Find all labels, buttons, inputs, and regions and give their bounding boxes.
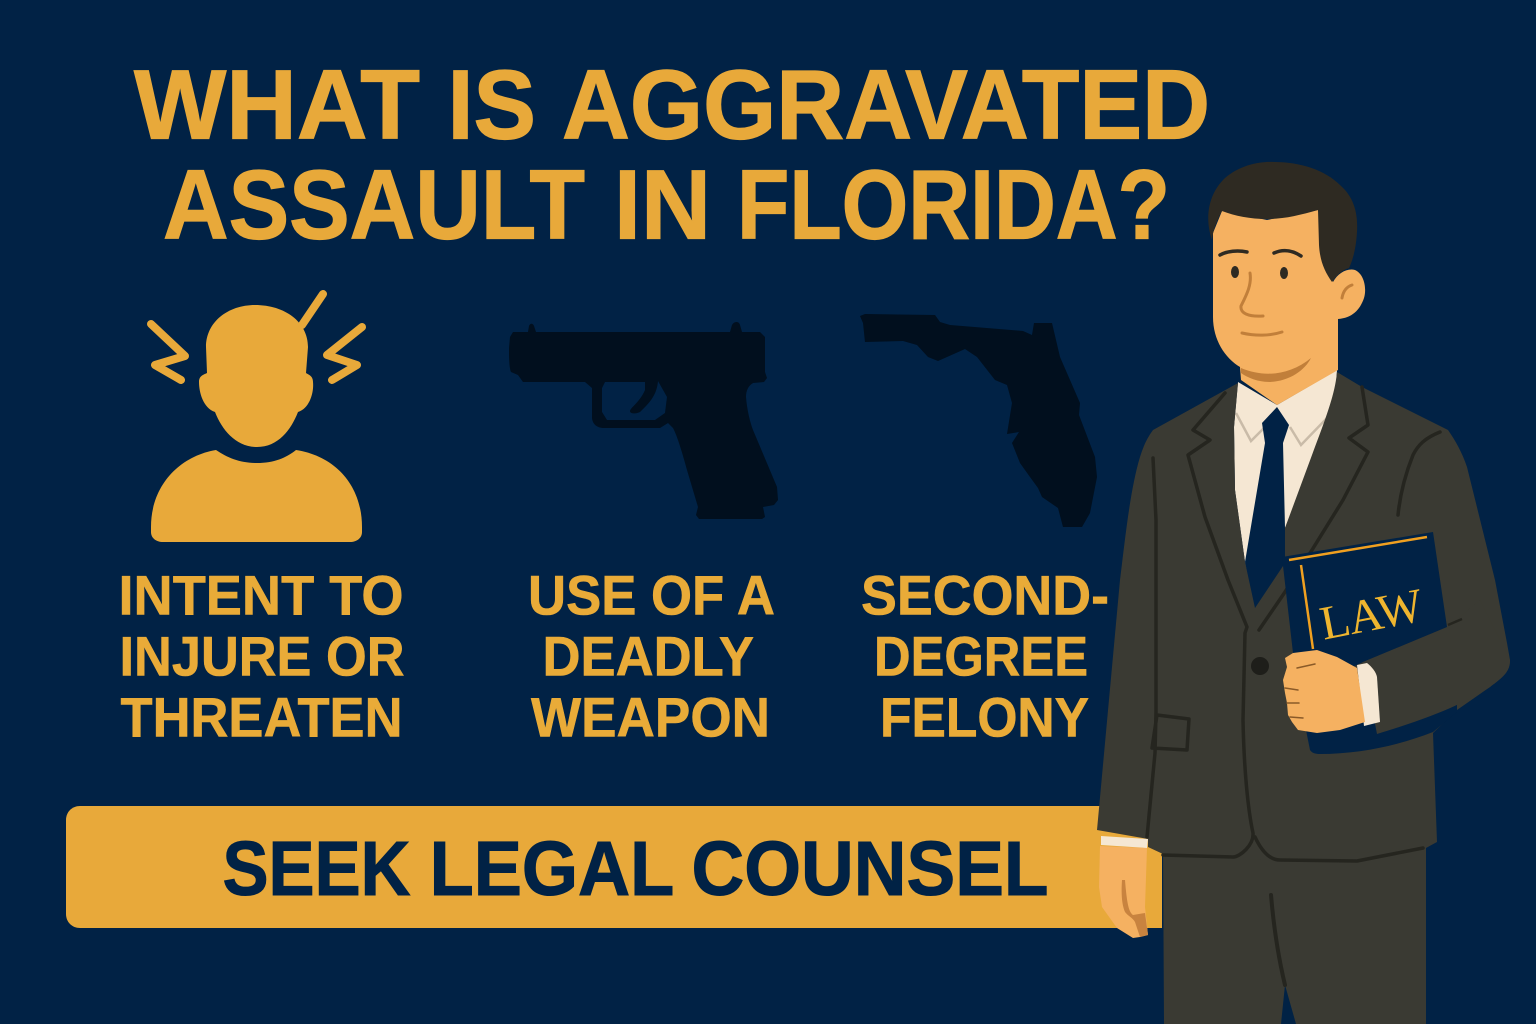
hand holding book	[1283, 650, 1365, 733]
label: intent: INJURE OR	[120, 624, 404, 688]
title: AGGRAVATED	[562, 50, 1210, 160]
title	[134, 50, 1210, 260]
icon: pistol	[509, 322, 778, 519]
tie	[1245, 407, 1289, 608]
collar shadows	[1236, 413, 1328, 445]
shirt cuff left	[1101, 836, 1148, 848]
banner text	[222, 826, 1048, 912]
label: intent: INTENT TO	[118, 564, 404, 626]
label: intent	[118, 564, 404, 748]
label: felony: DEGREE	[874, 624, 1088, 688]
banner text: COUNSEL	[692, 826, 1048, 912]
label: felony: SECOND-	[861, 564, 1109, 626]
left hand	[1099, 846, 1148, 938]
shirt	[1234, 370, 1337, 600]
jacket seams	[1147, 387, 1440, 861]
label: felony	[861, 564, 1109, 748]
neck and face	[1213, 210, 1365, 405]
title: ASSAULT	[163, 150, 585, 260]
title: IS	[448, 50, 536, 160]
jacket button	[1251, 657, 1269, 675]
jacket sleeve over book	[1363, 600, 1510, 734]
banner text: SEEK	[222, 826, 410, 912]
book	[1282, 532, 1457, 754]
figure: lawyer	[1097, 162, 1510, 1024]
label: intent: THREATEN	[120, 686, 402, 748]
title: WHAT	[134, 50, 420, 160]
label: felony: FELONY	[880, 686, 1089, 748]
trousers	[1163, 845, 1426, 1024]
label: weapon: USE OF A	[528, 564, 775, 626]
title: IN	[614, 150, 711, 260]
book label: LAW	[1316, 579, 1428, 651]
banner	[66, 806, 1162, 928]
icon: head with alarm lines	[151, 294, 362, 542]
hair	[1208, 162, 1357, 282]
label: weapon	[528, 564, 775, 748]
chin shadow	[1241, 358, 1311, 382]
label: weapon: WEAPON	[531, 686, 770, 748]
banner text: LEGAL	[430, 826, 674, 912]
face details	[1220, 251, 1352, 335]
icon: Florida silhouette	[860, 314, 1097, 527]
shirt cuff right	[1357, 663, 1380, 726]
book gold lines	[1289, 537, 1427, 649]
label: weapon: DEADLY	[542, 624, 754, 688]
suit jacket	[1097, 372, 1510, 860]
title: FLORIDA?	[737, 150, 1170, 260]
